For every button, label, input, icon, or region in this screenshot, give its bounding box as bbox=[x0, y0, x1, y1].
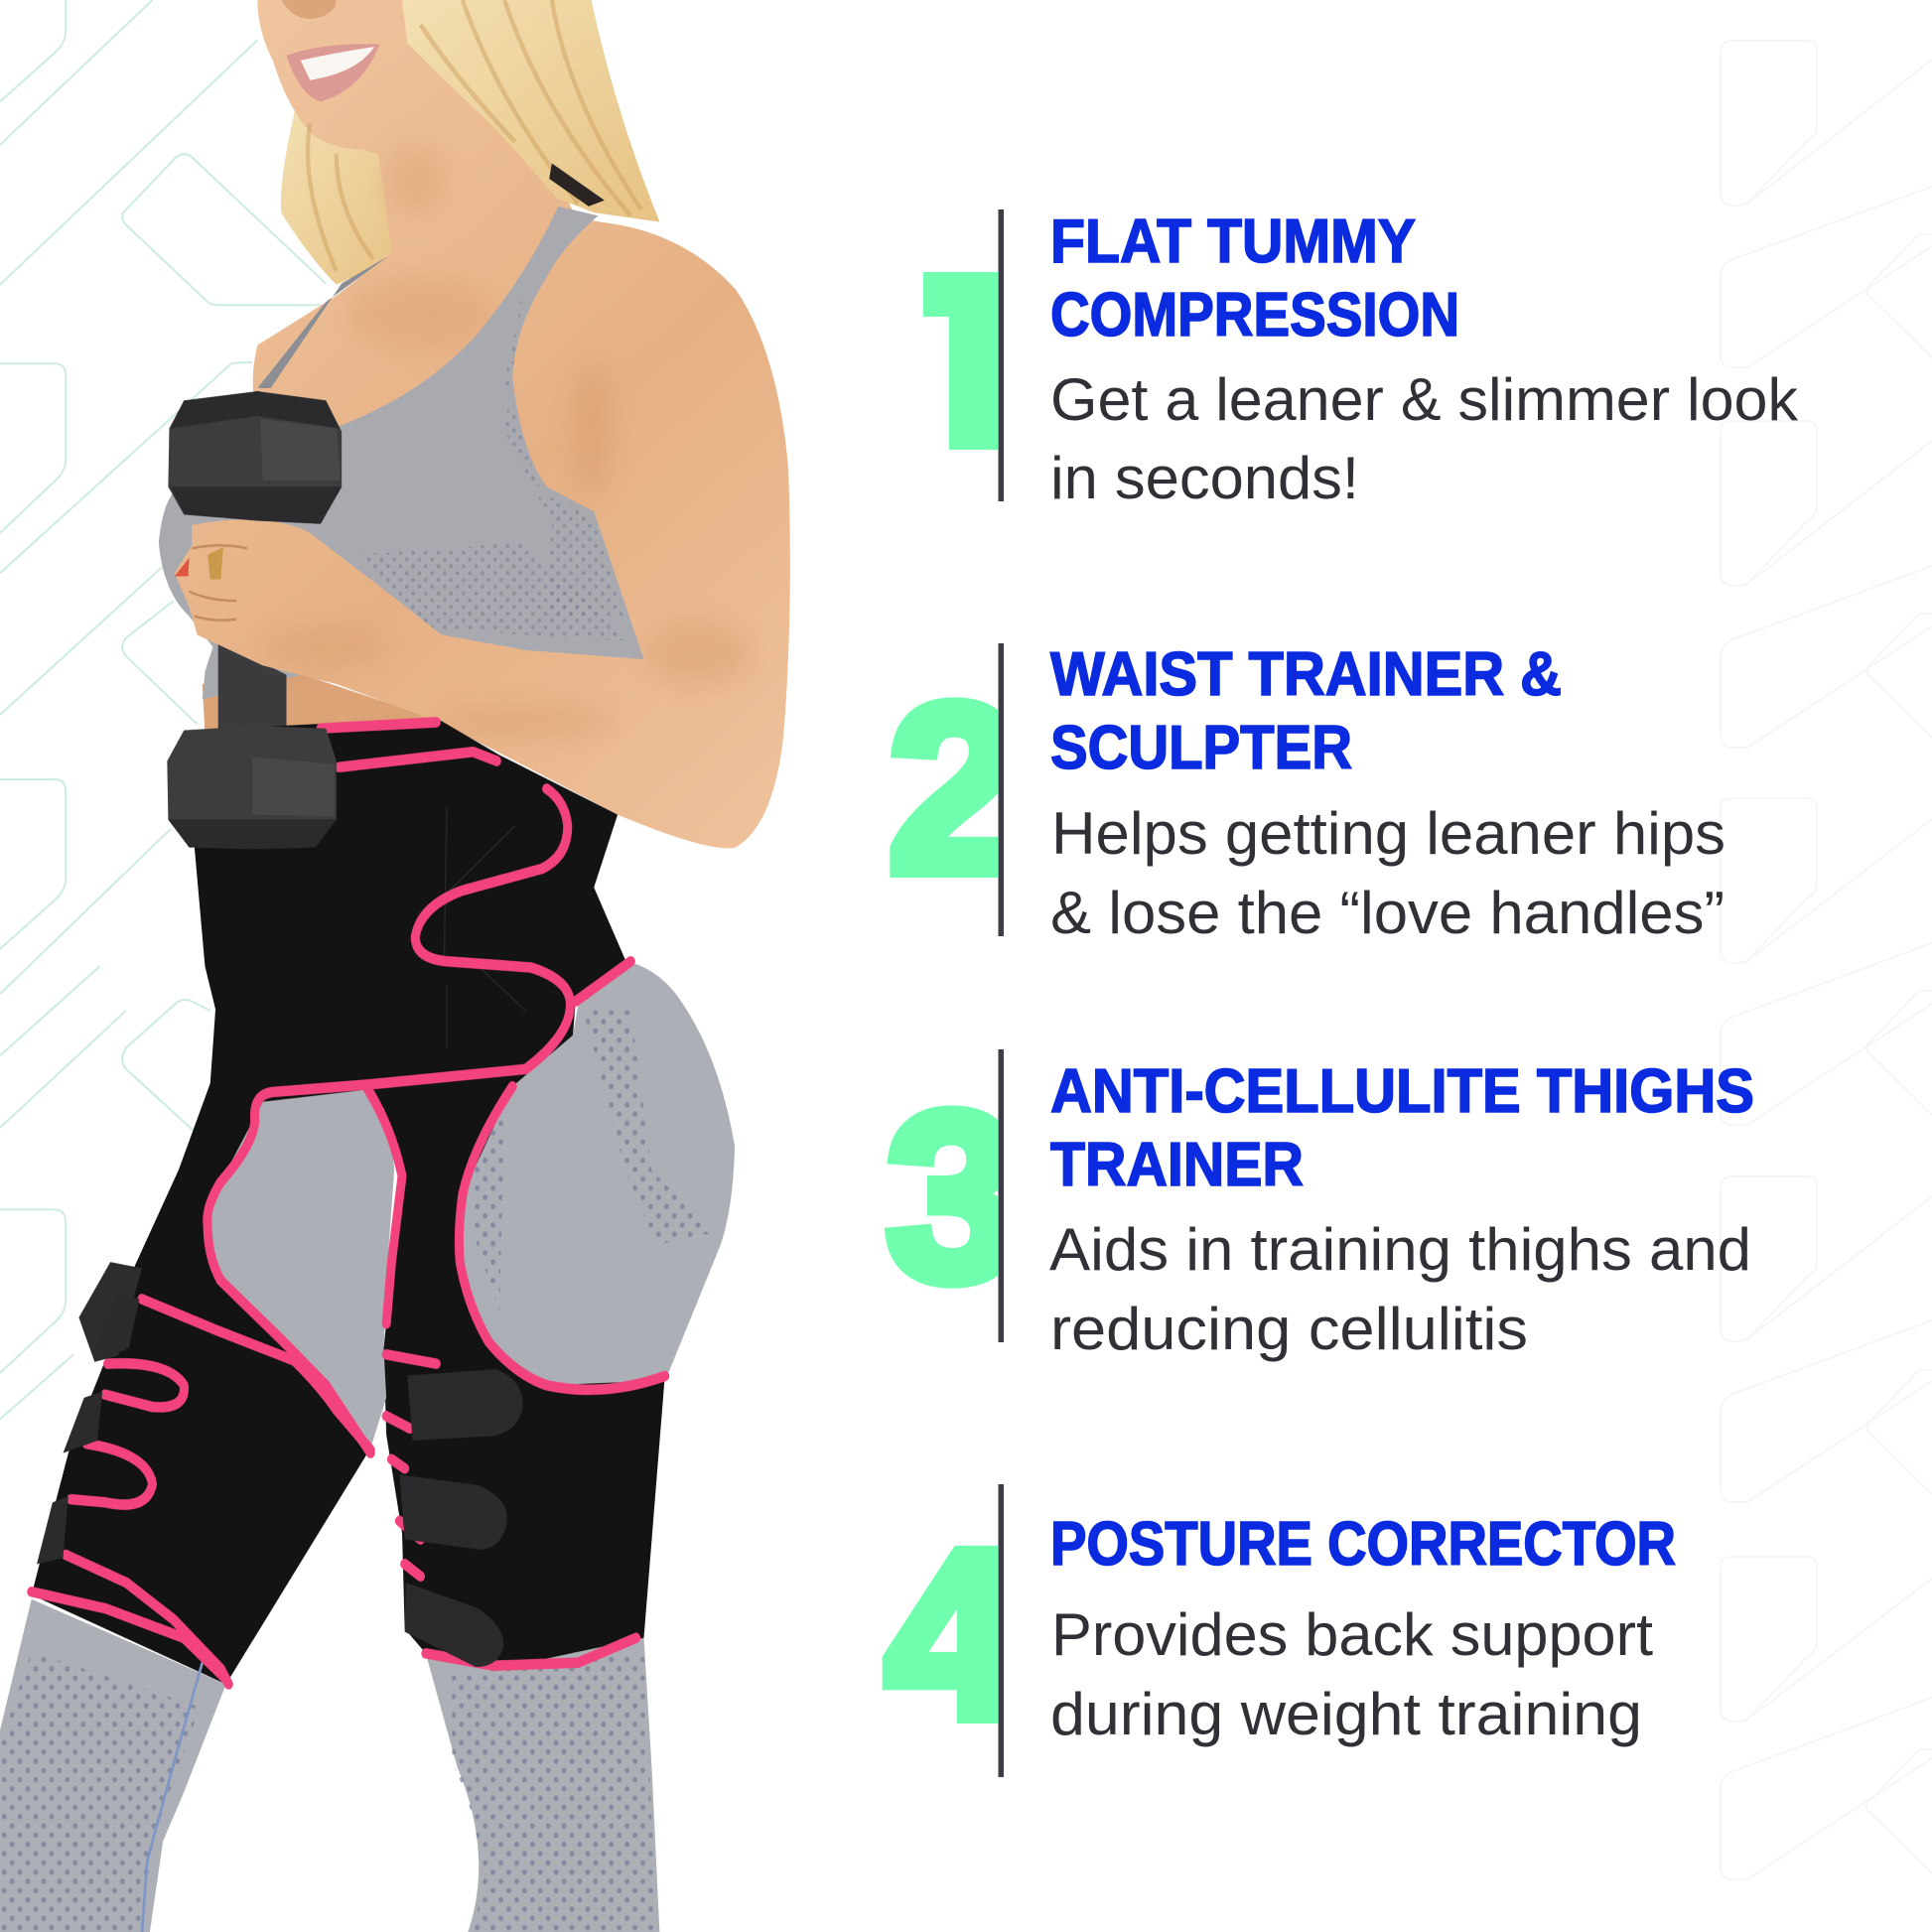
skin: face, neck, chest bbox=[253, 0, 578, 431]
heading 1: COMPRESSION bbox=[1050, 281, 1459, 349]
forearm and hand bbox=[175, 519, 762, 848]
woman wearing waist and thigh trainer, holding dumbbell bbox=[0, 0, 790, 1932]
numeral 4: 4 bbox=[886, 1501, 1018, 1767]
heading 2: WAIST TRAINER & bbox=[1050, 640, 1562, 709]
background pattern: right faint shapes bbox=[1721, 41, 1932, 1879]
description 2: Helps getting leaner hips bbox=[1051, 800, 1725, 867]
description 4: Provides back support bbox=[1051, 1601, 1653, 1668]
divider bar 1 bbox=[999, 209, 1004, 501]
description 3: Aids in training thighs and bbox=[1049, 1216, 1751, 1283]
sports bra bbox=[159, 207, 644, 699]
dark strap behind hair bbox=[549, 163, 605, 207]
second dumbbell behind knee bbox=[78, 1262, 142, 1362]
hair strands bbox=[308, 0, 641, 271]
description 1: in seconds! bbox=[1050, 445, 1359, 511]
description 3: reducing cellulitis bbox=[1050, 1296, 1528, 1362]
neck shadow bbox=[383, 145, 447, 212]
heading 2: SCULPTER bbox=[1050, 714, 1352, 782]
legging dot texture bbox=[0, 1011, 715, 1932]
finger creases bbox=[190, 545, 247, 621]
dumbbell heads bbox=[167, 391, 342, 849]
heading 1: FLAT TUMMY bbox=[1050, 207, 1416, 276]
description 1: Get a leaner & slimmer look bbox=[1050, 366, 1799, 433]
chest shadow bbox=[346, 277, 494, 351]
dumbbell handle bbox=[218, 641, 287, 734]
description 2: & lose the “love handles” bbox=[1050, 880, 1725, 946]
heading 4: POSTURE CORRECTOR bbox=[1050, 1510, 1676, 1579]
divider bar 4 bbox=[999, 1484, 1004, 1777]
benefit 1 bbox=[890, 207, 1799, 511]
divider bar 3 bbox=[999, 1049, 1004, 1342]
right hair bbox=[402, 0, 659, 221]
midriff bbox=[203, 672, 442, 734]
waist trainer and thigh wraps: black neoprene bbox=[32, 718, 665, 1684]
velcro tabs on front thigh bbox=[37, 1293, 139, 1564]
velcro straps on rear thigh bbox=[399, 1369, 523, 1667]
left hair behind neck bbox=[281, 101, 405, 285]
numeral 2: 2 bbox=[889, 655, 1021, 921]
nail bbox=[175, 558, 190, 576]
pink piping bbox=[32, 722, 665, 1684]
leg seam bbox=[142, 1663, 203, 1932]
benefit 3 bbox=[887, 1049, 1754, 1362]
benefit 4 bbox=[886, 1484, 1676, 1777]
background pattern: left teal lines bbox=[0, 0, 326, 1419]
description 4: during weight training bbox=[1050, 1681, 1642, 1747]
leggings: hip, crotch and lower legs bbox=[0, 961, 735, 1932]
benefit 2 bbox=[889, 640, 1725, 946]
upper arm bbox=[504, 204, 790, 848]
trainer side panel fold bbox=[444, 807, 525, 1047]
heading 3: TRAINER bbox=[1050, 1131, 1304, 1199]
arm muscle shading bbox=[263, 363, 752, 737]
heading 3: ANTI-CELLULITE THIGHS bbox=[1050, 1057, 1754, 1126]
ring bbox=[207, 547, 223, 579]
numeral 1: 1 bbox=[890, 234, 1022, 500]
numeral 3: 3 bbox=[887, 1063, 1019, 1329]
divider bar 2 bbox=[999, 643, 1004, 936]
lips and smile bbox=[287, 44, 379, 101]
nose shadow bbox=[281, 0, 337, 19]
